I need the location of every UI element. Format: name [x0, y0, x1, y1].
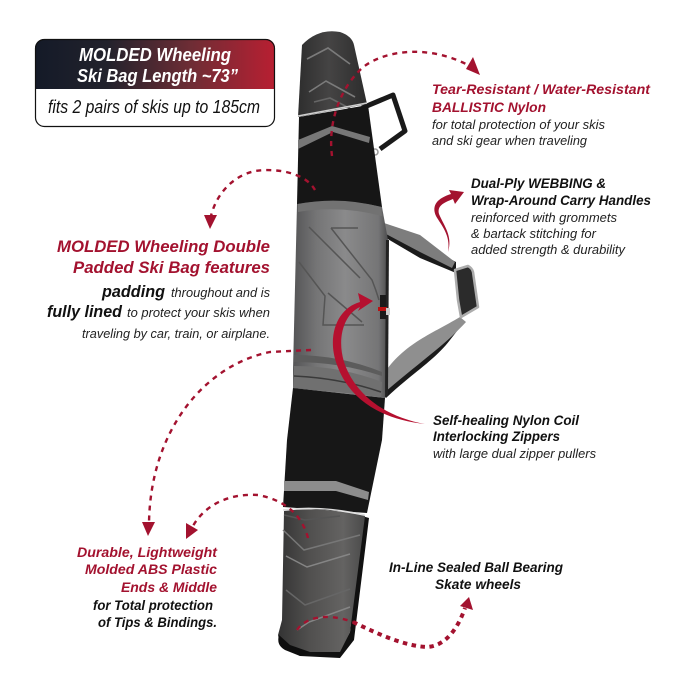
upper molded end — [298, 31, 367, 117]
callout: molded ABS ends: Molded ABS Plastic — [85, 561, 217, 577]
arrow: to skate wheels — [297, 597, 473, 647]
callout: double padded: traveling by car, train, or airplane. — [82, 327, 270, 341]
callout: webbing and handles — [471, 175, 651, 257]
arrow: to ballistic nylon — [331, 52, 480, 156]
callout: webbing and handles: reinforced with grommets — [471, 211, 617, 225]
title heading: MOLDED Wheeling — [79, 45, 231, 65]
upper black section — [297, 105, 382, 207]
callout: molded ABS ends — [77, 544, 218, 630]
shoulder strap — [380, 222, 478, 398]
callout: skate wheels — [389, 560, 564, 592]
chevron details top — [307, 48, 355, 109]
callout: zippers — [433, 413, 596, 461]
callout: double padded: Padded Ski Bag features — [73, 258, 270, 277]
callout: molded ABS ends: of Tips & Bindings. — [98, 614, 217, 630]
callout: molded ABS ends: Ends & Middle — [121, 579, 217, 595]
callout: ballistic nylon — [432, 81, 651, 148]
callout: webbing and handles: & bartack stitching for — [471, 227, 597, 241]
callout: skate wheels: In-Line Sealed Ball Bearing — [389, 560, 564, 575]
callout: skate wheels: Skate wheels — [435, 577, 521, 592]
lower black section — [283, 388, 385, 513]
callout: double padded: to protect your skis when — [127, 306, 270, 320]
right edge of bag — [290, 516, 369, 658]
callout: zippers: Self-healing Nylon Coil — [433, 413, 579, 428]
callout: double padded: fully lined — [47, 302, 123, 321]
upper grey band — [298, 126, 370, 149]
callout: molded ABS ends: Durable, Lightweight — [77, 544, 218, 560]
zipper pullers — [378, 295, 390, 319]
middle molded panel — [293, 201, 389, 398]
lower trim — [283, 508, 365, 515]
callout: double padded: throughout and is — [171, 286, 270, 300]
callout: ballistic nylon: and ski gear when traveling — [432, 134, 587, 148]
callout: double padded — [47, 237, 270, 341]
upper trim — [298, 103, 367, 116]
callout: molded ABS ends: for Total protection — [93, 597, 213, 613]
lower molded end — [278, 509, 365, 652]
callout: webbing and handles: added strength & durability — [471, 243, 626, 257]
title subtext: fits 2 pairs of skis up to 185cm — [48, 97, 260, 117]
ski bag product — [278, 31, 478, 658]
callout: webbing and handles: Dual-Ply WEBBING & — [471, 175, 606, 191]
arrow: to double padded text — [204, 170, 315, 229]
title heading line two: Ski Bag Length ~73” — [77, 66, 238, 86]
callout: ballistic nylon: Tear-Resistant / Water-Resistant — [432, 81, 651, 97]
wheels — [278, 635, 310, 656]
arrow: to webbing — [434, 190, 464, 252]
callout: ballistic nylon: BALLISTIC Nylon — [432, 99, 546, 115]
lower grey band — [284, 481, 369, 500]
chevron details bottom — [283, 515, 360, 630]
carry handle top — [354, 95, 405, 155]
callout: zippers: with large dual zipper pullers — [433, 447, 596, 461]
title box — [35, 39, 275, 127]
callout: double padded: MOLDED Wheeling Double — [57, 237, 270, 256]
arrow: end to ABS text — [186, 495, 308, 539]
callout: webbing and handles: Wrap-Around Carry Handles — [471, 192, 651, 208]
arrow: middle to ABS text — [142, 350, 311, 536]
callout: double padded: padding — [101, 282, 166, 301]
arrow: to zipper — [333, 293, 425, 424]
callout: zippers: Interlocking Zippers — [433, 429, 560, 444]
callout: ballistic nylon: for total protection of your skis — [432, 118, 605, 132]
